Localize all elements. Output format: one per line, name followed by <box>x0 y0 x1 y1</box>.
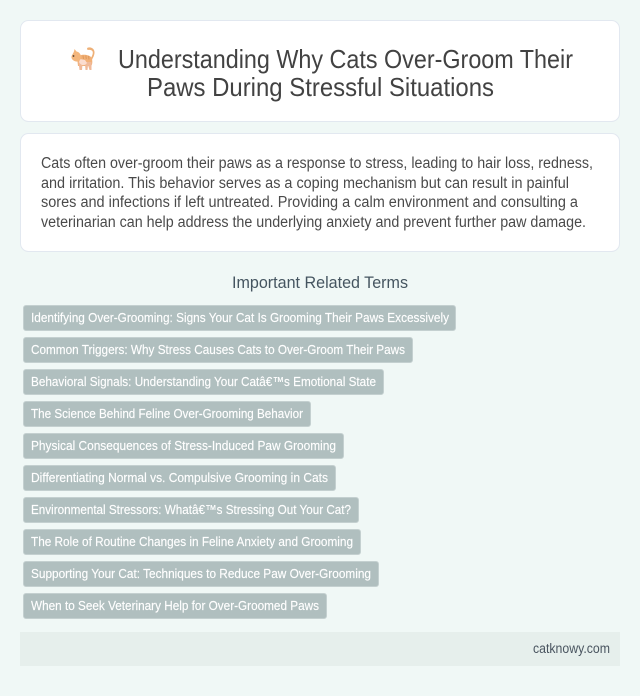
tag 5 <box>24 434 344 458</box>
tag 9: Supporting Your Cat: Techniques to Reduce Paw Over-Grooming <box>31 566 371 581</box>
tag 2 <box>24 338 412 362</box>
title text: Paws During Stressful Situations <box>147 72 494 102</box>
summary text: sores and infections if left untreated. Providing a calm environment and consulting a <box>41 194 578 211</box>
tag 1 <box>24 306 456 330</box>
footer bar <box>20 632 620 666</box>
title text <box>118 44 573 102</box>
tag 10 <box>24 594 326 618</box>
tag 3: Behavioral Signals: Understanding Your Catâ€™s Emotional State <box>31 374 376 389</box>
tag 6: Differentiating Normal vs. Compulsive Grooming in Cats <box>31 470 328 485</box>
summary text: veterinarian can help address the underlying anxiety and prevent further paw damage. <box>41 214 586 231</box>
panel: summary card <box>20 134 620 252</box>
icon: cat <box>71 47 95 70</box>
tag 4 <box>24 402 310 426</box>
heading: important related terms: Important Related Terms <box>232 274 408 292</box>
list of related term tags <box>24 306 456 618</box>
summary text: and irritation. This behavior serves as a coping mechanism but can result in painful <box>41 175 569 192</box>
summary text: Cats often over-groom their paws as a response to stress, leading to hair loss, redness, <box>41 155 593 172</box>
tag 8 <box>24 530 360 554</box>
tag 9 <box>24 562 378 586</box>
tag 4: The Science Behind Feline Over-Grooming Behavior <box>31 406 304 421</box>
tag 2: Common Triggers: Why Stress Causes Cats to Over-Groom Their Paws <box>31 342 405 357</box>
tag 3 <box>24 370 384 394</box>
tag 7 <box>24 498 358 522</box>
panel: title card <box>20 20 620 122</box>
tag 8: The Role of Routine Changes in Feline Anxiety and Grooming <box>31 534 353 549</box>
title text: Understanding Why Cats Over-Groom Their <box>118 44 573 74</box>
tag 10: When to Seek Veterinary Help for Over-Groomed Paws <box>31 598 319 613</box>
tag 5: Physical Consequences of Stress-Induced Paw Grooming <box>31 438 336 453</box>
tag 6 <box>24 466 336 490</box>
footer text: site name: catknowy.com <box>533 641 610 656</box>
summary text <box>41 155 593 231</box>
tag 7: Environmental Stressors: Whatâ€™s Stressing Out Your Cat? <box>31 502 351 517</box>
tag 1: Identifying Over-Grooming: Signs Your Cat Is Grooming Their Paws Excessively <box>31 310 449 325</box>
